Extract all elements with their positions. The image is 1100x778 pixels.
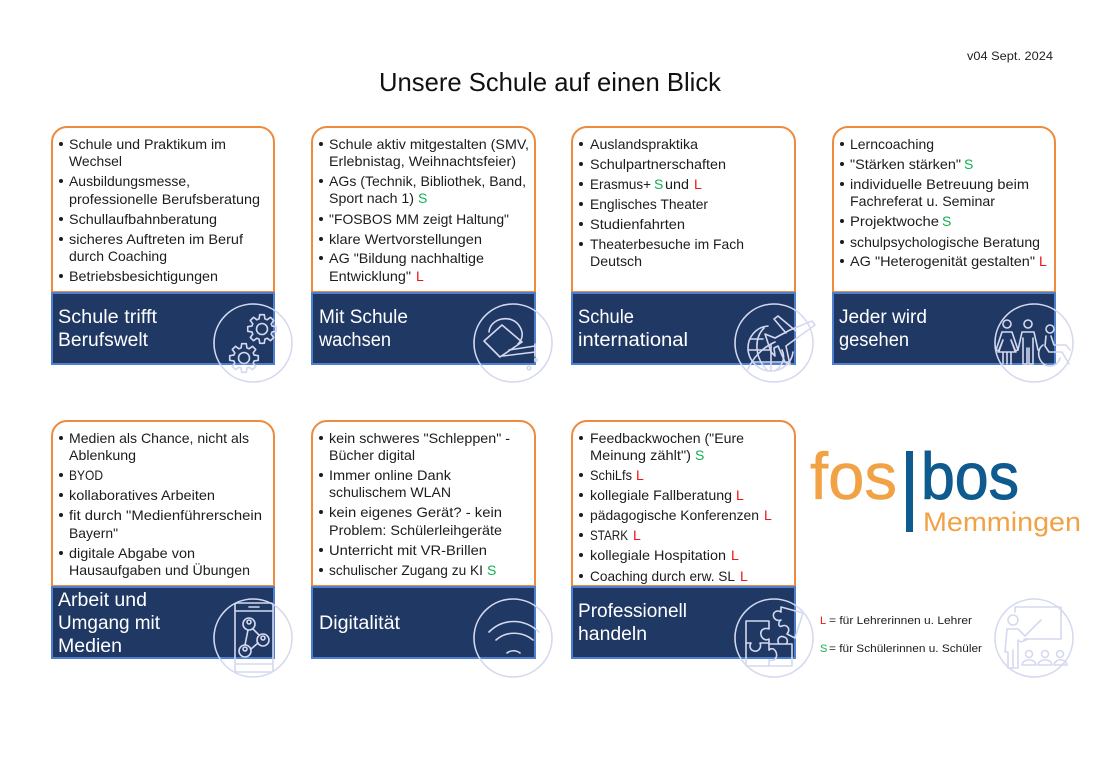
list: Digitalität: schulischem WLAN [329, 484, 451, 500]
list: Professionell handeln: kollegiale Fallberatung [590, 487, 732, 503]
list: Schule trifft Berufswelt: Wechsel [69, 153, 122, 169]
list: Arbeit und Umgang mit Medien: kollaboratives Arbeiten [69, 487, 215, 503]
list: Mit Schule wachsen [319, 136, 529, 284]
list: Jeder wird gesehen: Fachreferat u. Seminar [850, 193, 995, 209]
heading: Jeder wird gesehen: gesehen [839, 330, 909, 351]
legend: L [820, 615, 826, 627]
list: Schule trifft Berufswelt: Betriebsbesichtigungen [69, 268, 218, 284]
list: Professionell handeln: L [764, 507, 772, 523]
list: Jeder wird gesehen: AG "Heterogenität gestalten" [850, 253, 1035, 269]
heading: Professionell handeln: Professionell [578, 601, 687, 622]
list: Arbeit und Umgang mit Medien: Medien als Chance, nicht als [69, 430, 249, 446]
list: Arbeit und Umgang mit Medien: fit durch "Medienführerschein [69, 507, 262, 523]
list: Professionell handeln: L [740, 568, 748, 584]
heading: Mit Schule wachsen [318, 307, 408, 351]
list: Professionell handeln: S [695, 447, 704, 463]
panel: Mit Schule wachsen [312, 127, 552, 382]
list: Professionell handeln: L [736, 487, 744, 503]
list: Professionell handeln: L [636, 467, 644, 483]
list: Mit Schule wachsen: Schule aktiv mitgestalten (SMV, [329, 136, 529, 152]
list: Digitalität: S [487, 562, 496, 578]
list: Professionell handeln [579, 430, 772, 584]
icon: people and wheelchair user [995, 304, 1073, 382]
list: Mit Schule wachsen: Erlebnistag, Weihnachtsfeier) [329, 153, 516, 169]
heading: Schule international: Schule [578, 307, 634, 328]
list: Schule international: und [665, 176, 689, 192]
list: Jeder wird gesehen: schulpsychologische Beratung [850, 234, 1040, 250]
list: Professionell handeln: Meinung zählt") [590, 447, 691, 463]
list: Jeder wird gesehen: S [964, 156, 973, 172]
heading: Arbeit und Umgang mit Medien: Medien [58, 636, 122, 657]
list: Schule international: Schulpartnerschaften [590, 156, 726, 172]
panel: Schule trifft Berufswelt [52, 127, 292, 382]
list: Schule international: S [654, 176, 663, 192]
list: Arbeit und Umgang mit Medien: BYOD [69, 467, 103, 483]
list: Schule international: Studienfahrten [590, 216, 685, 232]
list: Arbeit und Umgang mit Medien: Hausaufgaben und Übungen [69, 561, 250, 578]
panel: Arbeit und Umgang mit Medien [52, 421, 292, 677]
heading: Schule trifft Berufswelt: Schule trifft [58, 307, 158, 328]
list: Jeder wird gesehen: individuelle Betreuung beim [850, 176, 1029, 192]
list: Arbeit und Umgang mit Medien: digitale Abgabe von [69, 545, 195, 561]
panel: Jeder wird gesehen [833, 127, 1073, 382]
icon: smartphone with network [214, 599, 292, 677]
list: Digitalität: Bücher digital [329, 447, 415, 463]
heading: Professionell handeln: handeln [578, 624, 647, 645]
list: Jeder wird gesehen: L [1039, 253, 1047, 269]
icon: teacher at board [995, 599, 1073, 677]
list: Mit Schule wachsen: AGs (Technik, Bibliothek, Band, [329, 173, 526, 189]
panel: Schule international [572, 127, 815, 382]
list: Schule trifft Berufswelt: Ausbildungsmesse, [69, 173, 190, 189]
list: Professionell handeln: pädagogische Konferenzen [590, 507, 759, 523]
heading: Jeder wird gesehen [839, 307, 927, 351]
list: Schule international: Englisches Theater [590, 196, 708, 212]
list: Schule international: L [694, 176, 702, 192]
list: Professionell handeln: kollegiale Hospitation [590, 547, 726, 563]
legend: = für Schülerinnen u. Schüler [829, 643, 982, 655]
list: Schule trifft Berufswelt [59, 136, 260, 284]
list: Schule trifft Berufswelt: Schule und Praktikum im [69, 136, 226, 152]
version note: v04 Sept. 2024 [967, 49, 1053, 63]
heading: Mit Schule wachsen: Mit Schule [319, 307, 408, 328]
heading: Schule trifft Berufswelt: Berufswelt [58, 330, 149, 351]
list: Digitalität: kein eigenes Gerät? - kein [329, 504, 502, 520]
legend [820, 615, 982, 655]
icon: gears [214, 304, 292, 382]
list: Schule international: Deutsch [590, 253, 642, 269]
legend: S [820, 643, 827, 655]
list: Professionell handeln: Coaching durch erw. SL [590, 568, 735, 584]
logo: fos|bos Memmingen [810, 439, 1081, 537]
heading: Schule trifft Berufswelt [58, 307, 158, 351]
list: Arbeit und Umgang mit Medien: Ablenkung [69, 447, 136, 463]
heading: Professionell handeln [578, 601, 687, 645]
logo: fos|bos Memmingen: Memmingen [923, 507, 1081, 537]
list: Digitalität: Immer online Dank [329, 467, 452, 483]
list: Jeder wird gesehen: Projektwoche [850, 213, 939, 229]
list: Schule trifft Berufswelt: Schullaufbahnberatung [69, 211, 217, 227]
list: Schule international: Erasmus+ [590, 176, 651, 192]
list: Professionell handeln: SchiLfs [590, 467, 632, 483]
list: Schule international: Theaterbesuche im Fach [590, 236, 744, 252]
list: Schule international: Auslandspraktika [590, 136, 698, 152]
list: Mit Schule wachsen: S [418, 190, 427, 206]
list: Jeder wird gesehen: "Stärken stärken" [850, 156, 961, 172]
panel: Digitalität [312, 421, 552, 677]
heading: Arbeit und Umgang mit Medien: Umgang mit [58, 613, 161, 634]
list: Arbeit und Umgang mit Medien [59, 430, 262, 578]
heading: Schule international [578, 307, 688, 351]
list: Jeder wird gesehen: S [942, 213, 951, 229]
list: Jeder wird gesehen: Lerncoaching [850, 136, 934, 152]
panel: Professionell handeln [572, 421, 813, 677]
list: Mit Schule wachsen: L [416, 268, 424, 284]
list: Digitalität [319, 430, 510, 578]
list: Mit Schule wachsen: AG "Bildung nachhaltige [329, 250, 484, 266]
icon: watering can [474, 304, 552, 382]
list: Professionell handeln: L [731, 547, 739, 563]
heading: Jeder wird gesehen: Jeder wird [839, 307, 927, 328]
list: Mit Schule wachsen: Entwicklung" [329, 268, 411, 284]
list: Mit Schule wachsen: klare Wertvorstellungen [329, 231, 482, 247]
icon: wifi signal [474, 599, 552, 677]
heading: Arbeit und Umgang mit Medien [58, 590, 161, 657]
list: Digitalität: schulischer Zugang zu KI [329, 562, 483, 578]
list: Arbeit und Umgang mit Medien: Bayern" [69, 525, 118, 541]
list: Schule international [579, 136, 744, 269]
heading: Digitalität: Digitalität [319, 613, 401, 634]
logo: fos|bos Memmingen: bos [921, 439, 1019, 513]
list: Schule trifft Berufswelt: professionelle Berufsberatung [69, 191, 260, 207]
list: Schule trifft Berufswelt: durch Coaching [69, 248, 167, 264]
list: Mit Schule wachsen: Sport nach 1) [329, 190, 414, 206]
heading: Arbeit und Umgang mit Medien: Arbeit und [58, 590, 147, 611]
title: Unsere Schule auf einen Blick [379, 67, 722, 97]
heading: Mit Schule wachsen: wachsen [318, 330, 391, 351]
list: Mit Schule wachsen: "FOSBOS MM zeigt Haltung" [329, 211, 509, 227]
list: Professionell handeln: STARK [590, 527, 629, 543]
list: Digitalität: Problem: Schülerleihgeräte [329, 522, 502, 538]
list: Professionell handeln: Feedbackwochen ("Eure [590, 430, 744, 446]
list: Schule trifft Berufswelt: sicheres Auftreten im Beruf [69, 231, 243, 247]
list: Professionell handeln: L [633, 527, 641, 543]
icon: puzzle pieces [735, 599, 813, 677]
list: Digitalität: Unterricht mit VR-Brillen [329, 542, 487, 558]
list: Jeder wird gesehen [840, 136, 1047, 269]
heading: Schule international: international [578, 330, 688, 351]
legend: = für Lehrerinnen u. Lehrer [829, 615, 972, 627]
logo: fos|bos Memmingen: fos [810, 439, 897, 513]
list: Digitalität: kein schweres "Schleppen" - [329, 430, 510, 446]
icon: globe with airplane [735, 304, 815, 382]
